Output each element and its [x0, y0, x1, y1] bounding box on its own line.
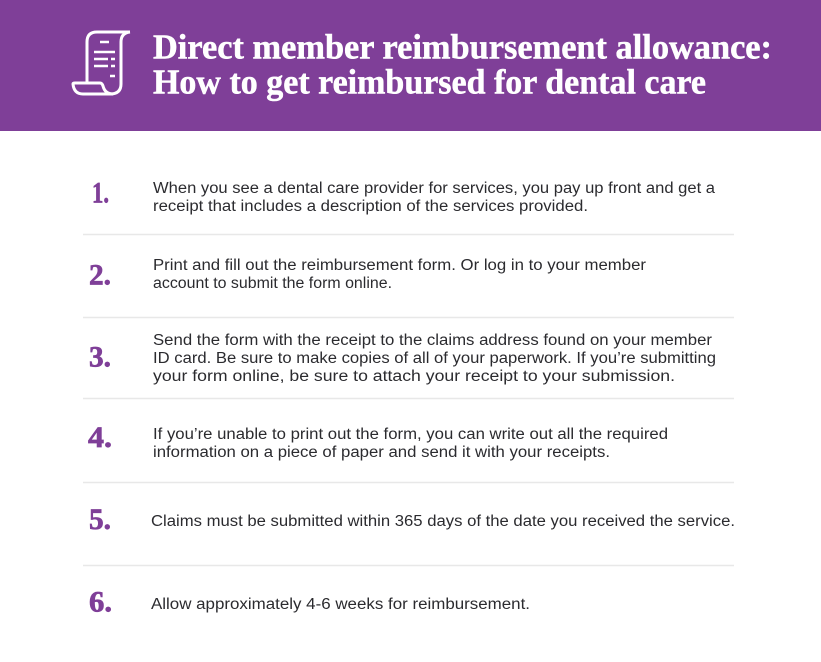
- icon: receipt scroll: [73, 32, 130, 94]
- step 1: 1.: [92, 176, 109, 210]
- step 3: 3.: [89, 340, 111, 374]
- title: Direct member reimbursement allowance:: [153, 28, 772, 66]
- step 2: account to submit the form online.: [153, 275, 392, 292]
- step 2: 2.: [89, 258, 111, 292]
- step 4: [88, 421, 668, 461]
- step 2: Print and fill out the reimbursement form. Or log in to your member: [153, 257, 646, 274]
- step 4: information on a piece of paper and send it with your receipts.: [153, 444, 610, 461]
- step 3: [89, 332, 716, 385]
- step 6: [89, 586, 530, 618]
- step 6: Allow approximately 4-6 weeks for reimbursement.: [151, 596, 530, 613]
- step 5: 5.: [89, 503, 111, 536]
- title: [153, 28, 772, 102]
- step 1: When you see a dental care provider for services, you pay up front and get a: [153, 180, 715, 197]
- step 5: [89, 503, 735, 536]
- step 2: [89, 257, 646, 292]
- step 4: 4.: [88, 421, 112, 454]
- step 4: If you’re unable to print out the form, you can write out all the required: [153, 426, 668, 443]
- step 3: your form online, be sure to attach your receipt to your submission.: [153, 368, 675, 385]
- step 3: Send the form with the receipt to the claims address found on your member: [153, 332, 712, 349]
- step 6: 6.: [89, 586, 112, 618]
- header band: [0, 0, 821, 131]
- title: How to get reimbursed for dental care: [153, 62, 706, 102]
- step 5: Claims must be submitted within 365 days of the date you received the service.: [151, 513, 735, 530]
- step 1: [92, 176, 715, 215]
- step 1: receipt that includes a description of the services provided.: [153, 198, 588, 215]
- step 3: ID card. Be sure to make copies of all of your paperwork. If you’re submitting: [153, 350, 716, 367]
- dividers: [83, 234, 734, 566]
